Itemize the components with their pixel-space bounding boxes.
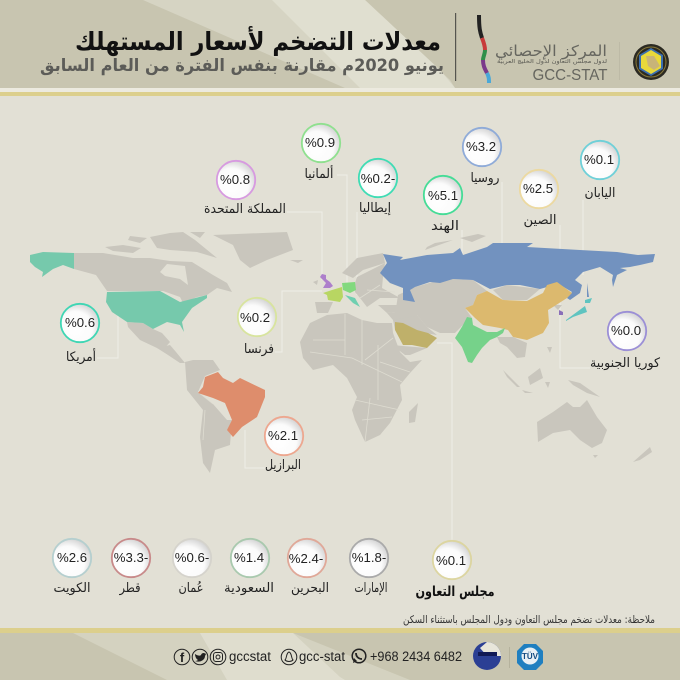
subtitle: يونيو 2020م مقارنة بنفس الفترة من العام السابق [40, 56, 444, 76]
world map [30, 175, 655, 540]
callout: France: فرنسا [244, 342, 274, 357]
title: معدلات التضخم لأسعار المستهلك [75, 26, 441, 57]
callout: Oman: عُمان [178, 580, 204, 596]
callout: GCC [416, 541, 494, 600]
callout: UAE: %1.8- [352, 550, 386, 565]
map: Japan [566, 298, 592, 321]
callout: Japan: %0.1 [584, 152, 614, 167]
callout: Saudi Arabia [224, 539, 274, 596]
icon: twitter [192, 649, 208, 665]
map: China [465, 282, 572, 340]
logo text: GCC-Stat: GCC-STAT [532, 67, 608, 84]
footer band [0, 628, 680, 680]
logo text: GCC-Stat [495, 42, 608, 84]
logo text: GCC-Stat: لدول مجلس التعاون لدول الخليج العربية [497, 59, 607, 65]
callout: Oman [173, 539, 211, 596]
icon: GCC-Stat ribbon [479, 15, 489, 83]
callout: Saudi Arabia: السعودية [224, 581, 274, 596]
map: Sakhalin [587, 283, 589, 297]
icon: GCC emblem [633, 44, 669, 80]
callout: China [520, 170, 558, 228]
icon: TUV badge [517, 644, 543, 670]
callout: Oman: %0.6- [175, 550, 209, 565]
map: Italy [345, 295, 360, 307]
map: United Kingdom [320, 274, 333, 288]
callout: Germany: %0.9 [305, 135, 335, 150]
callout: Russia [463, 128, 501, 186]
callout: United Kingdom: %0.8 [220, 172, 250, 187]
callout: United Kingdom: المملكة المتحدة [204, 202, 286, 217]
callout: China: الصين [524, 213, 556, 228]
callout: Germany [302, 124, 340, 182]
callout: France [238, 298, 276, 357]
callout: Kuwait [53, 539, 91, 596]
icon: TUV badge: TÜV [522, 652, 539, 661]
map: grey land [74, 232, 652, 473]
callout: India [424, 176, 462, 234]
callout: USA [61, 304, 99, 365]
callout: South Korea [590, 312, 661, 371]
icon: facebook [174, 649, 190, 665]
map: France [323, 287, 343, 302]
callout: Qatar: قطر [119, 581, 140, 596]
footer divider [509, 647, 510, 668]
callout: UAE: الإمارات [354, 581, 388, 596]
callout: Japan [581, 141, 619, 201]
callout: USA: %0.6 [65, 315, 95, 330]
callout: Italy: إيطاليا [359, 201, 391, 216]
callout: Russia: روسيا [470, 171, 500, 186]
callout: Qatar [112, 539, 150, 596]
callout: GCC: %0.1 [436, 553, 466, 568]
icon: facebook: f [180, 650, 185, 665]
icon: ISO badge [473, 642, 501, 670]
callout: Brazil: البرازيل [265, 458, 301, 473]
handle: gccstat: gccstat [229, 649, 271, 664]
callout: Kuwait: الكويت [54, 581, 90, 596]
callout: France: %0.2 [240, 310, 270, 325]
callout: South Korea: %0.0 [611, 323, 641, 338]
logo text: GCC-Stat: المركز الإحصائي [495, 42, 607, 61]
callout: Kuwait: %2.6 [57, 550, 87, 565]
callout: Italy: %0.2- [361, 171, 395, 186]
map: leader lines [97, 175, 590, 540]
phone number: +968 2434 6482 [370, 648, 462, 664]
callout: Brazil [265, 417, 303, 473]
map: Saudi Arabia [395, 322, 437, 348]
callout: India: الهند [431, 219, 459, 234]
header band [0, 0, 680, 96]
callout: Bahrain: %2.4- [289, 551, 323, 566]
callout: GCC: مجلس التعاون [416, 584, 494, 600]
callout: China: %2.5 [523, 181, 553, 196]
callout: Japan: اليابان [584, 186, 616, 201]
callout: Bahrain: البحرين [291, 581, 329, 596]
callout: Italy [359, 159, 397, 216]
header divider [455, 13, 456, 81]
icon: instagram [210, 649, 226, 665]
map: Brazil [198, 372, 265, 437]
callout: Qatar: %3.3- [114, 550, 148, 565]
icon: whatsapp [352, 649, 366, 663]
callout: India: %5.1 [428, 188, 458, 203]
map: India [455, 317, 505, 363]
map: Russia [380, 243, 655, 302]
callout: UAE [350, 539, 388, 596]
icon: snapchat [281, 649, 297, 665]
map: South Korea [559, 310, 563, 315]
map: Germany [342, 282, 356, 293]
callout: Germany: ألمانيا [304, 165, 334, 182]
callout: United Kingdom [204, 161, 286, 217]
callout: Saudi Arabia: %1.4 [234, 550, 264, 565]
callout: Bahrain [288, 539, 329, 596]
callout: Brazil: %2.1 [268, 428, 298, 443]
callout: Russia: %3.2 [466, 139, 496, 154]
callout: South Korea: كوريا الجنوبية [590, 356, 661, 371]
callout: USA: أمريكا [66, 348, 96, 365]
handle: gcc-stat: gcc-stat [299, 649, 345, 664]
logo divider [619, 42, 620, 80]
map: Hudson Bay [160, 264, 188, 285]
map: USA [30, 252, 207, 332]
map: African borders [198, 285, 410, 442]
